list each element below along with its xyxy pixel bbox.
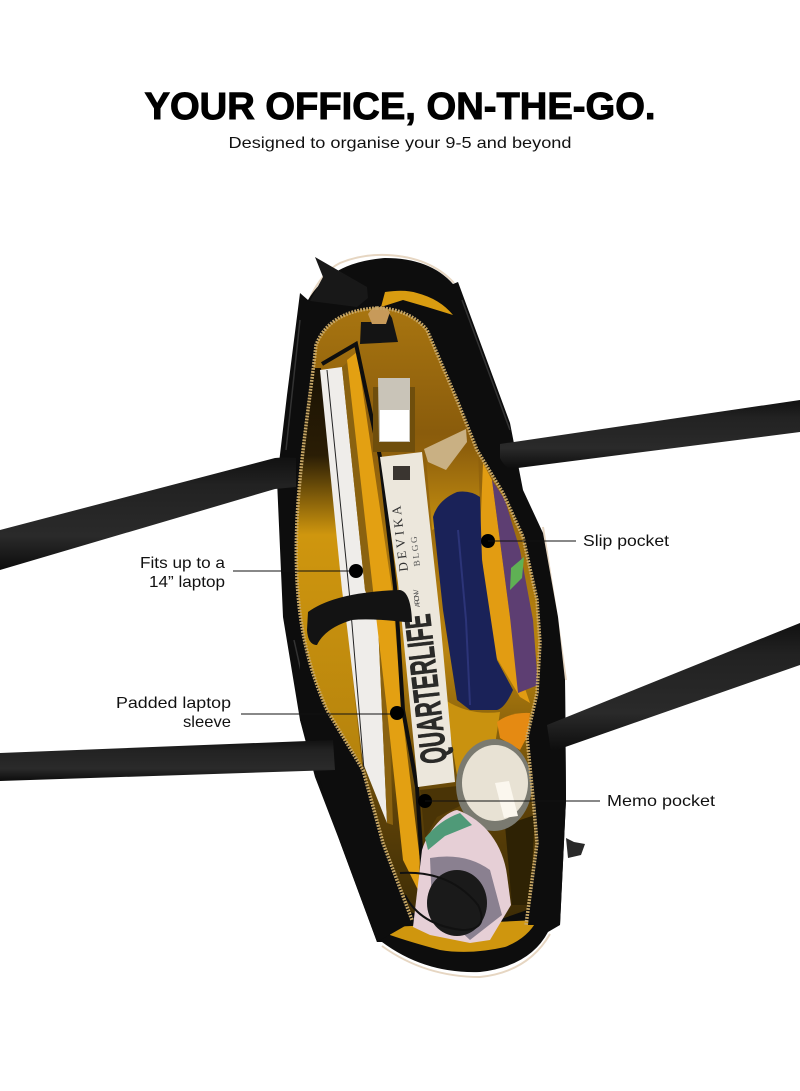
bag: top yellow lining fold: [381, 291, 453, 315]
laptop: seam: [327, 370, 364, 770]
bag: dark lining right of umbrella: [505, 815, 535, 905]
flask: outer ring: [456, 739, 532, 831]
callout text: laptop size: Fits up to a: [140, 555, 225, 572]
bag: bottom yellow lining: [390, 920, 537, 952]
book: title: QUARTERLIFE: [397, 612, 455, 766]
callout: memo pocket: [418, 793, 716, 810]
callout text: laptop size line two: 14” laptop: [149, 574, 225, 591]
padded sleeve: [322, 344, 423, 890]
callout line: padded sleeve: [241, 713, 397, 715]
zipper: right: [377, 308, 540, 925]
left bag wall: [300, 650, 412, 942]
callout dot: laptop size: [349, 564, 363, 578]
umbrella: cord: [400, 873, 482, 930]
callout dot: slip pocket: [481, 534, 495, 548]
bag: lining beside flask: [445, 700, 500, 782]
laptop: lid: [320, 367, 387, 823]
navy pouch: [433, 492, 513, 710]
umbrella: black cap: [427, 870, 487, 936]
sleeve: orange padding: [347, 352, 420, 890]
flask lid: [456, 739, 532, 831]
pouch: body: [433, 492, 513, 710]
tin: brown back: [373, 387, 415, 452]
umbrella: green print: [425, 813, 472, 850]
callout: padded sleeve: [116, 695, 404, 731]
flask: spout: [495, 781, 518, 818]
sleeve: black edge: [322, 344, 423, 880]
laptop: [320, 362, 393, 825]
bag: amber interior: [296, 308, 540, 930]
memo pocket shade: [420, 786, 460, 838]
callout line: memo pocket: [425, 800, 600, 802]
bag: closure flap: [310, 257, 368, 307]
tin: shine: [380, 410, 409, 441]
zipper: left: [296, 308, 412, 920]
strap: bottom left: [0, 740, 335, 781]
callout text: padded sleeve: Padded laptop: [116, 695, 231, 712]
side clasp: [566, 838, 585, 858]
callout text: memo pocket: Memo pocket: [607, 793, 716, 810]
book: small label: ARON V: [413, 589, 422, 608]
bag: black outer body: [277, 258, 566, 972]
callout dot: padded sleeve: [390, 706, 404, 720]
callout: slip pocket: [481, 533, 670, 550]
laptop: shadow edge: [342, 362, 393, 825]
book: author line two: BLGG: [409, 535, 422, 567]
flask: cream top: [462, 745, 528, 821]
callout: laptop size: [140, 555, 363, 591]
notebook: green splash: [510, 557, 524, 590]
book: quarterlife: [380, 452, 455, 787]
right zipper flap black: [527, 640, 566, 925]
laptop retaining strap: [307, 590, 412, 645]
strap: top right: [500, 400, 800, 469]
callout line: slip pocket: [488, 540, 576, 542]
bag: back edge trim: [310, 255, 566, 977]
book: cover: [380, 452, 455, 787]
strap: top left: [0, 458, 296, 570]
strap: bottom right: [547, 623, 800, 752]
bag: zipper top plate: [360, 310, 398, 344]
callout text: padded sleeve line two: sleeve: [183, 714, 231, 731]
book: author: DEVIKA: [388, 504, 411, 572]
purple notebook: [492, 480, 538, 693]
umbrella: pastel canopy: [413, 810, 511, 943]
bag: wall highlights: [286, 300, 558, 915]
bag: lining between book and pouch: [425, 443, 480, 530]
callout text: slip pocket: Slip pocket: [583, 533, 670, 550]
bag: bright left lining: [297, 368, 362, 765]
callout line: laptop size: [233, 570, 356, 572]
bag: zipper pull: [368, 307, 390, 324]
pouch: zipper: [458, 530, 470, 705]
orange pocket flap: [497, 713, 530, 750]
beige accessory: [424, 429, 467, 470]
umbrella: [400, 810, 511, 943]
title: YOUR OFFICE, ON-THE-GO.: [144, 86, 656, 128]
umbrella: folded fabric: [430, 856, 502, 940]
subtitle: Designed to organise your 9-5 and beyond: [228, 135, 572, 152]
orange slip pocket: [480, 463, 530, 703]
book: emblem: [393, 466, 410, 480]
bag: [277, 255, 585, 977]
callout dot: memo pocket: [418, 794, 432, 808]
silver card tin: [373, 378, 415, 452]
tin: metallic face: [378, 378, 410, 442]
notebook: cover: [492, 480, 538, 693]
